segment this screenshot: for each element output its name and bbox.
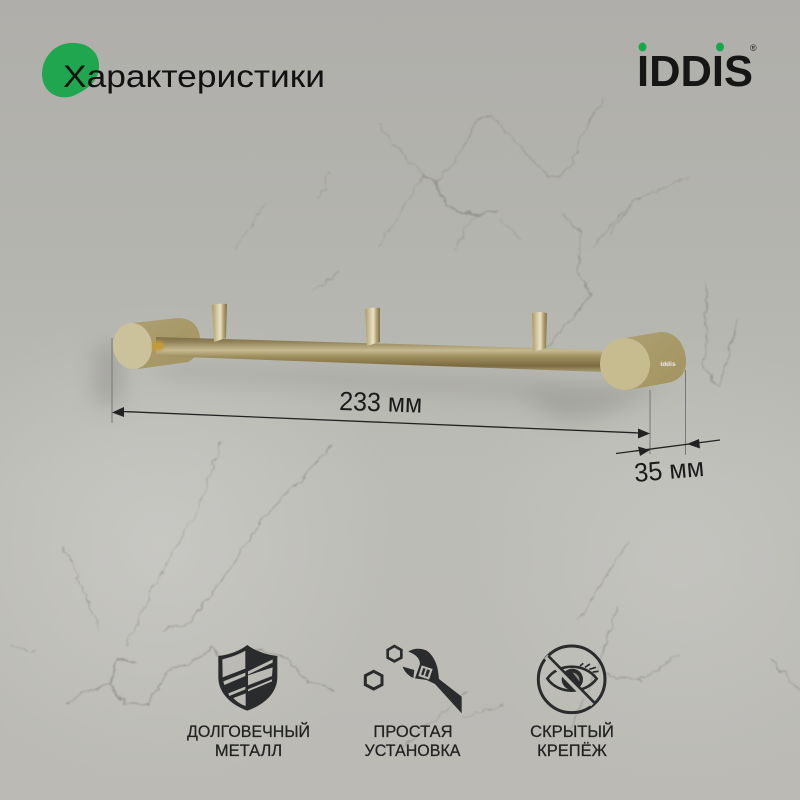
icon: crossed-out eye [538, 646, 605, 713]
icon: shield [218, 645, 277, 711]
feature: durable metal [187, 645, 310, 760]
right wall mount [597, 332, 686, 392]
left wall mount [111, 318, 200, 371]
hook 3 [532, 312, 547, 352]
panel: title [42, 43, 325, 97]
logo: IDDIS: ® [750, 43, 757, 53]
dimension: 35 mm [616, 370, 720, 488]
label: МЕТАЛЛ [215, 742, 282, 760]
logo: IDDIS: IDDIS [637, 47, 753, 96]
dimension: 233 mm [112, 338, 650, 454]
icon: green blob [42, 43, 99, 97]
label: ПРОСТАЯ [373, 723, 453, 741]
shadows under the hanger [95, 345, 670, 420]
heading: Характеристики [63, 58, 325, 94]
label: ДОЛГОВЕЧНЫЙ [187, 722, 310, 741]
label: СКРЫТЫЙ [530, 722, 614, 741]
hook 2 [365, 308, 380, 346]
right wall mount: iddis [660, 361, 676, 368]
feature: hidden fastener [530, 646, 614, 760]
feature: simple installation [364, 646, 462, 760]
label: КРЕПЁЖ [537, 742, 608, 760]
dimension: 35 mm: 35 мм [633, 452, 705, 488]
label: УСТАНОВКА [364, 742, 460, 760]
hook 1 [212, 304, 227, 342]
product: gold hook rail [111, 304, 686, 392]
icon: wrench and nuts [365, 646, 462, 713]
dimension: 233 mm: 233 мм [339, 386, 423, 419]
rail [156, 337, 602, 372]
